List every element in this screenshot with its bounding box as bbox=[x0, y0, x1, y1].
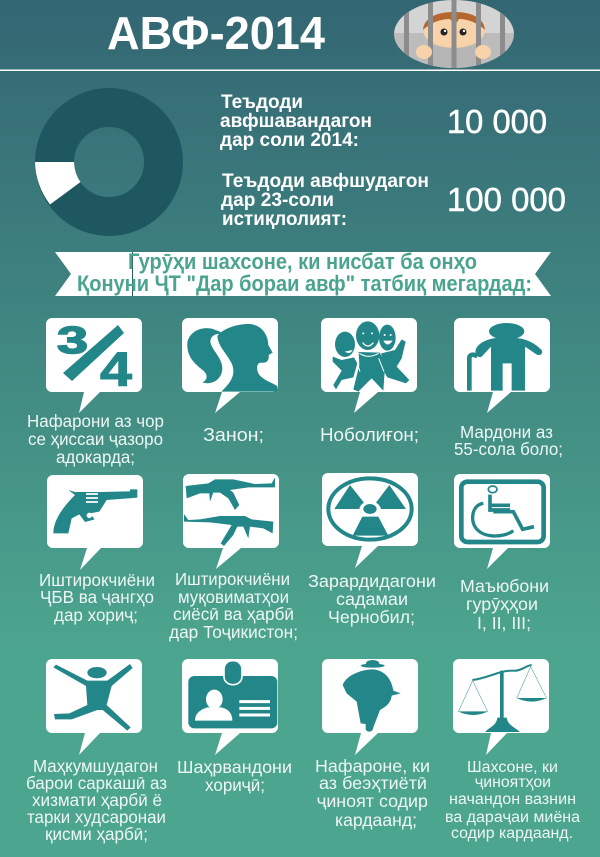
stat label 2 bbox=[221, 170, 429, 230]
label: Мардони аз bbox=[460, 422, 553, 442]
card: Chernobyl victims bbox=[308, 473, 436, 627]
label: хизмати ҳарбӣ ё bbox=[32, 790, 162, 810]
stat label 2: дар 23-соли bbox=[221, 189, 334, 211]
label: дар Тоҷикистон; bbox=[169, 622, 298, 642]
label bbox=[169, 569, 298, 642]
stat value 1: 10 000 bbox=[447, 103, 547, 140]
card: minor offences bbox=[445, 659, 580, 842]
stat label 1 bbox=[220, 91, 372, 151]
ribbon heading: Қонуни ҶТ "Дар бораи авф" татбиқ мегардад: bbox=[77, 271, 532, 296]
label: ва дараҷаи миёна bbox=[445, 809, 580, 826]
label bbox=[315, 756, 430, 830]
label: Маъюбони bbox=[460, 576, 549, 596]
card: women bbox=[182, 318, 278, 445]
label: муқовиматҳои bbox=[178, 587, 289, 607]
label: аз беэҳтиётӣ bbox=[319, 773, 427, 793]
stat label 2: истиқлолият: bbox=[222, 208, 347, 230]
stat label 1: дар соли 2014: bbox=[220, 129, 359, 151]
label: Иштирокчиёни bbox=[175, 569, 290, 589]
label: ҶБВ ва ҷангҳо bbox=[40, 587, 154, 607]
stat: pardoned in 2014 bbox=[220, 91, 547, 151]
label: Маҳкумшудагон bbox=[33, 756, 158, 776]
label: дар хориҷ; bbox=[54, 605, 138, 625]
label bbox=[27, 411, 164, 467]
card: negligent offenders bbox=[315, 659, 430, 830]
icon: woman silhouette bbox=[187, 324, 277, 392]
label bbox=[308, 571, 436, 627]
icon: two rifles bbox=[184, 477, 275, 546]
label: Иштирокчиёни bbox=[39, 570, 155, 590]
label: содир кардаанд. bbox=[451, 825, 573, 842]
card: men over 55 bbox=[454, 318, 563, 459]
label: Зарардидагони bbox=[308, 571, 436, 591]
label: ҷиноятҳои bbox=[475, 774, 551, 791]
label: Чернобил; bbox=[328, 607, 415, 627]
label: гурӯҳҳои bbox=[466, 594, 538, 614]
icon: fraction 3/4: 3 bbox=[57, 320, 88, 362]
label: тарки худсаронаи bbox=[27, 807, 166, 827]
stat label 1: авфшавандагон bbox=[220, 110, 372, 132]
title: АВФ-2014 bbox=[107, 7, 325, 59]
stat label 1: Теъдоди bbox=[221, 91, 303, 113]
label: Шахсоне, ки bbox=[467, 759, 558, 776]
card: war veterans abroad bbox=[39, 475, 155, 625]
label bbox=[445, 759, 580, 842]
icon: radiation symbol bbox=[328, 478, 412, 540]
icon: three children bbox=[333, 321, 409, 392]
icon: fraction 3/4 bbox=[57, 320, 132, 397]
icon: old man with cane bbox=[469, 323, 542, 391]
icon: ID badge bbox=[188, 661, 277, 728]
label: ҷиноят содир bbox=[317, 791, 428, 811]
icon: prisoner behind bars bbox=[394, 0, 514, 68]
label: барои саркашӣ аз bbox=[26, 773, 167, 793]
donut chart bbox=[35, 108, 164, 216]
label: начандон вазнин bbox=[449, 791, 576, 808]
icon: running man in hat bbox=[343, 660, 401, 732]
label bbox=[26, 756, 167, 844]
label: қисми ҳарбӣ; bbox=[45, 824, 148, 844]
label: хориҷӣ; bbox=[205, 775, 265, 795]
label: садамаи bbox=[336, 589, 408, 609]
label: Нафароне, ки bbox=[315, 756, 430, 776]
ribbon heading: Гурӯҳи шахсоне, ки нисбат ба онҳо bbox=[128, 249, 477, 274]
label bbox=[460, 576, 549, 633]
stat value 2: 100 000 bbox=[447, 181, 566, 218]
ribbon heading bbox=[55, 249, 551, 296]
label bbox=[177, 757, 292, 795]
label bbox=[454, 422, 563, 459]
label: Занон; bbox=[203, 425, 264, 445]
stat: pardoned in 23 years bbox=[221, 170, 566, 230]
icon: revolver bbox=[53, 489, 137, 533]
icon: jumping figure bbox=[53, 664, 133, 731]
label: Нафарони аз чор bbox=[27, 411, 164, 431]
label: се ҳиссаи ҷазоро bbox=[28, 429, 163, 449]
card: deserters bbox=[26, 659, 167, 844]
label: кардаанд; bbox=[335, 810, 417, 830]
label: Ноболиғон; bbox=[320, 425, 419, 445]
card: disabled persons bbox=[454, 474, 550, 633]
stat label 2: Теъдоди авфшудагон bbox=[222, 170, 429, 192]
label: I, II, III; bbox=[477, 613, 531, 633]
card: foreign citizens bbox=[177, 659, 292, 795]
card: minors bbox=[320, 318, 419, 445]
icon: scales of justice bbox=[458, 665, 547, 732]
card: three quarters bbox=[27, 318, 164, 467]
label: сиёсӣ ва ҳарбӣ bbox=[173, 604, 294, 624]
label bbox=[39, 570, 155, 625]
icon: fraction 3/4: 4 bbox=[100, 344, 132, 397]
icon: wheelchair sign bbox=[461, 482, 544, 542]
label: 55-сола боло; bbox=[454, 439, 563, 459]
label: адокарда; bbox=[56, 447, 135, 467]
card: civil war participants bbox=[169, 474, 298, 642]
label: Шаҳрвандони bbox=[177, 757, 292, 777]
